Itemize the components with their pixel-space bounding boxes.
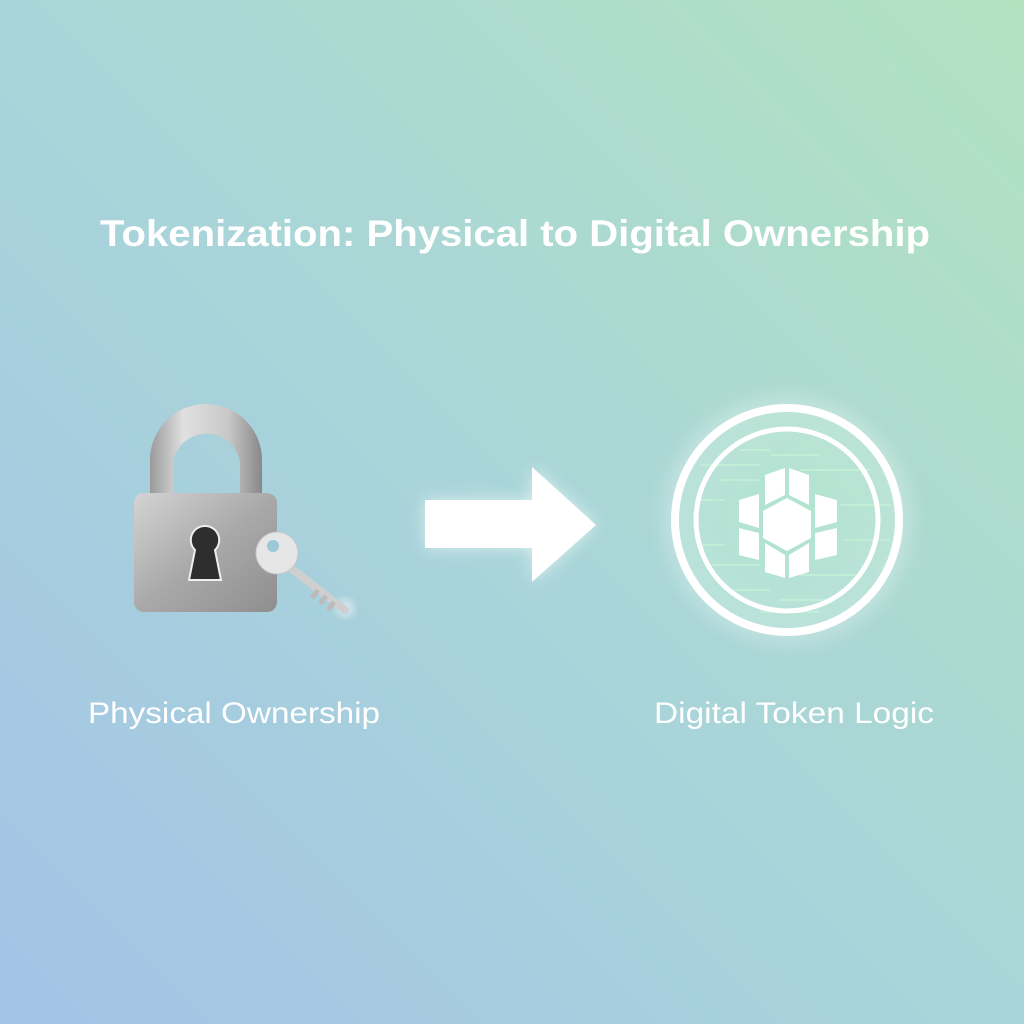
- title: Tokenization: Physical to Digital Ownership: [100, 213, 930, 254]
- icon: digital token: [662, 395, 912, 645]
- icon: padlock with key: [134, 404, 359, 622]
- arrow: [425, 467, 596, 582]
- label: digital token logic: Digital Token Logic: [654, 697, 934, 730]
- label: physical ownership: Physical Ownership: [88, 697, 380, 730]
